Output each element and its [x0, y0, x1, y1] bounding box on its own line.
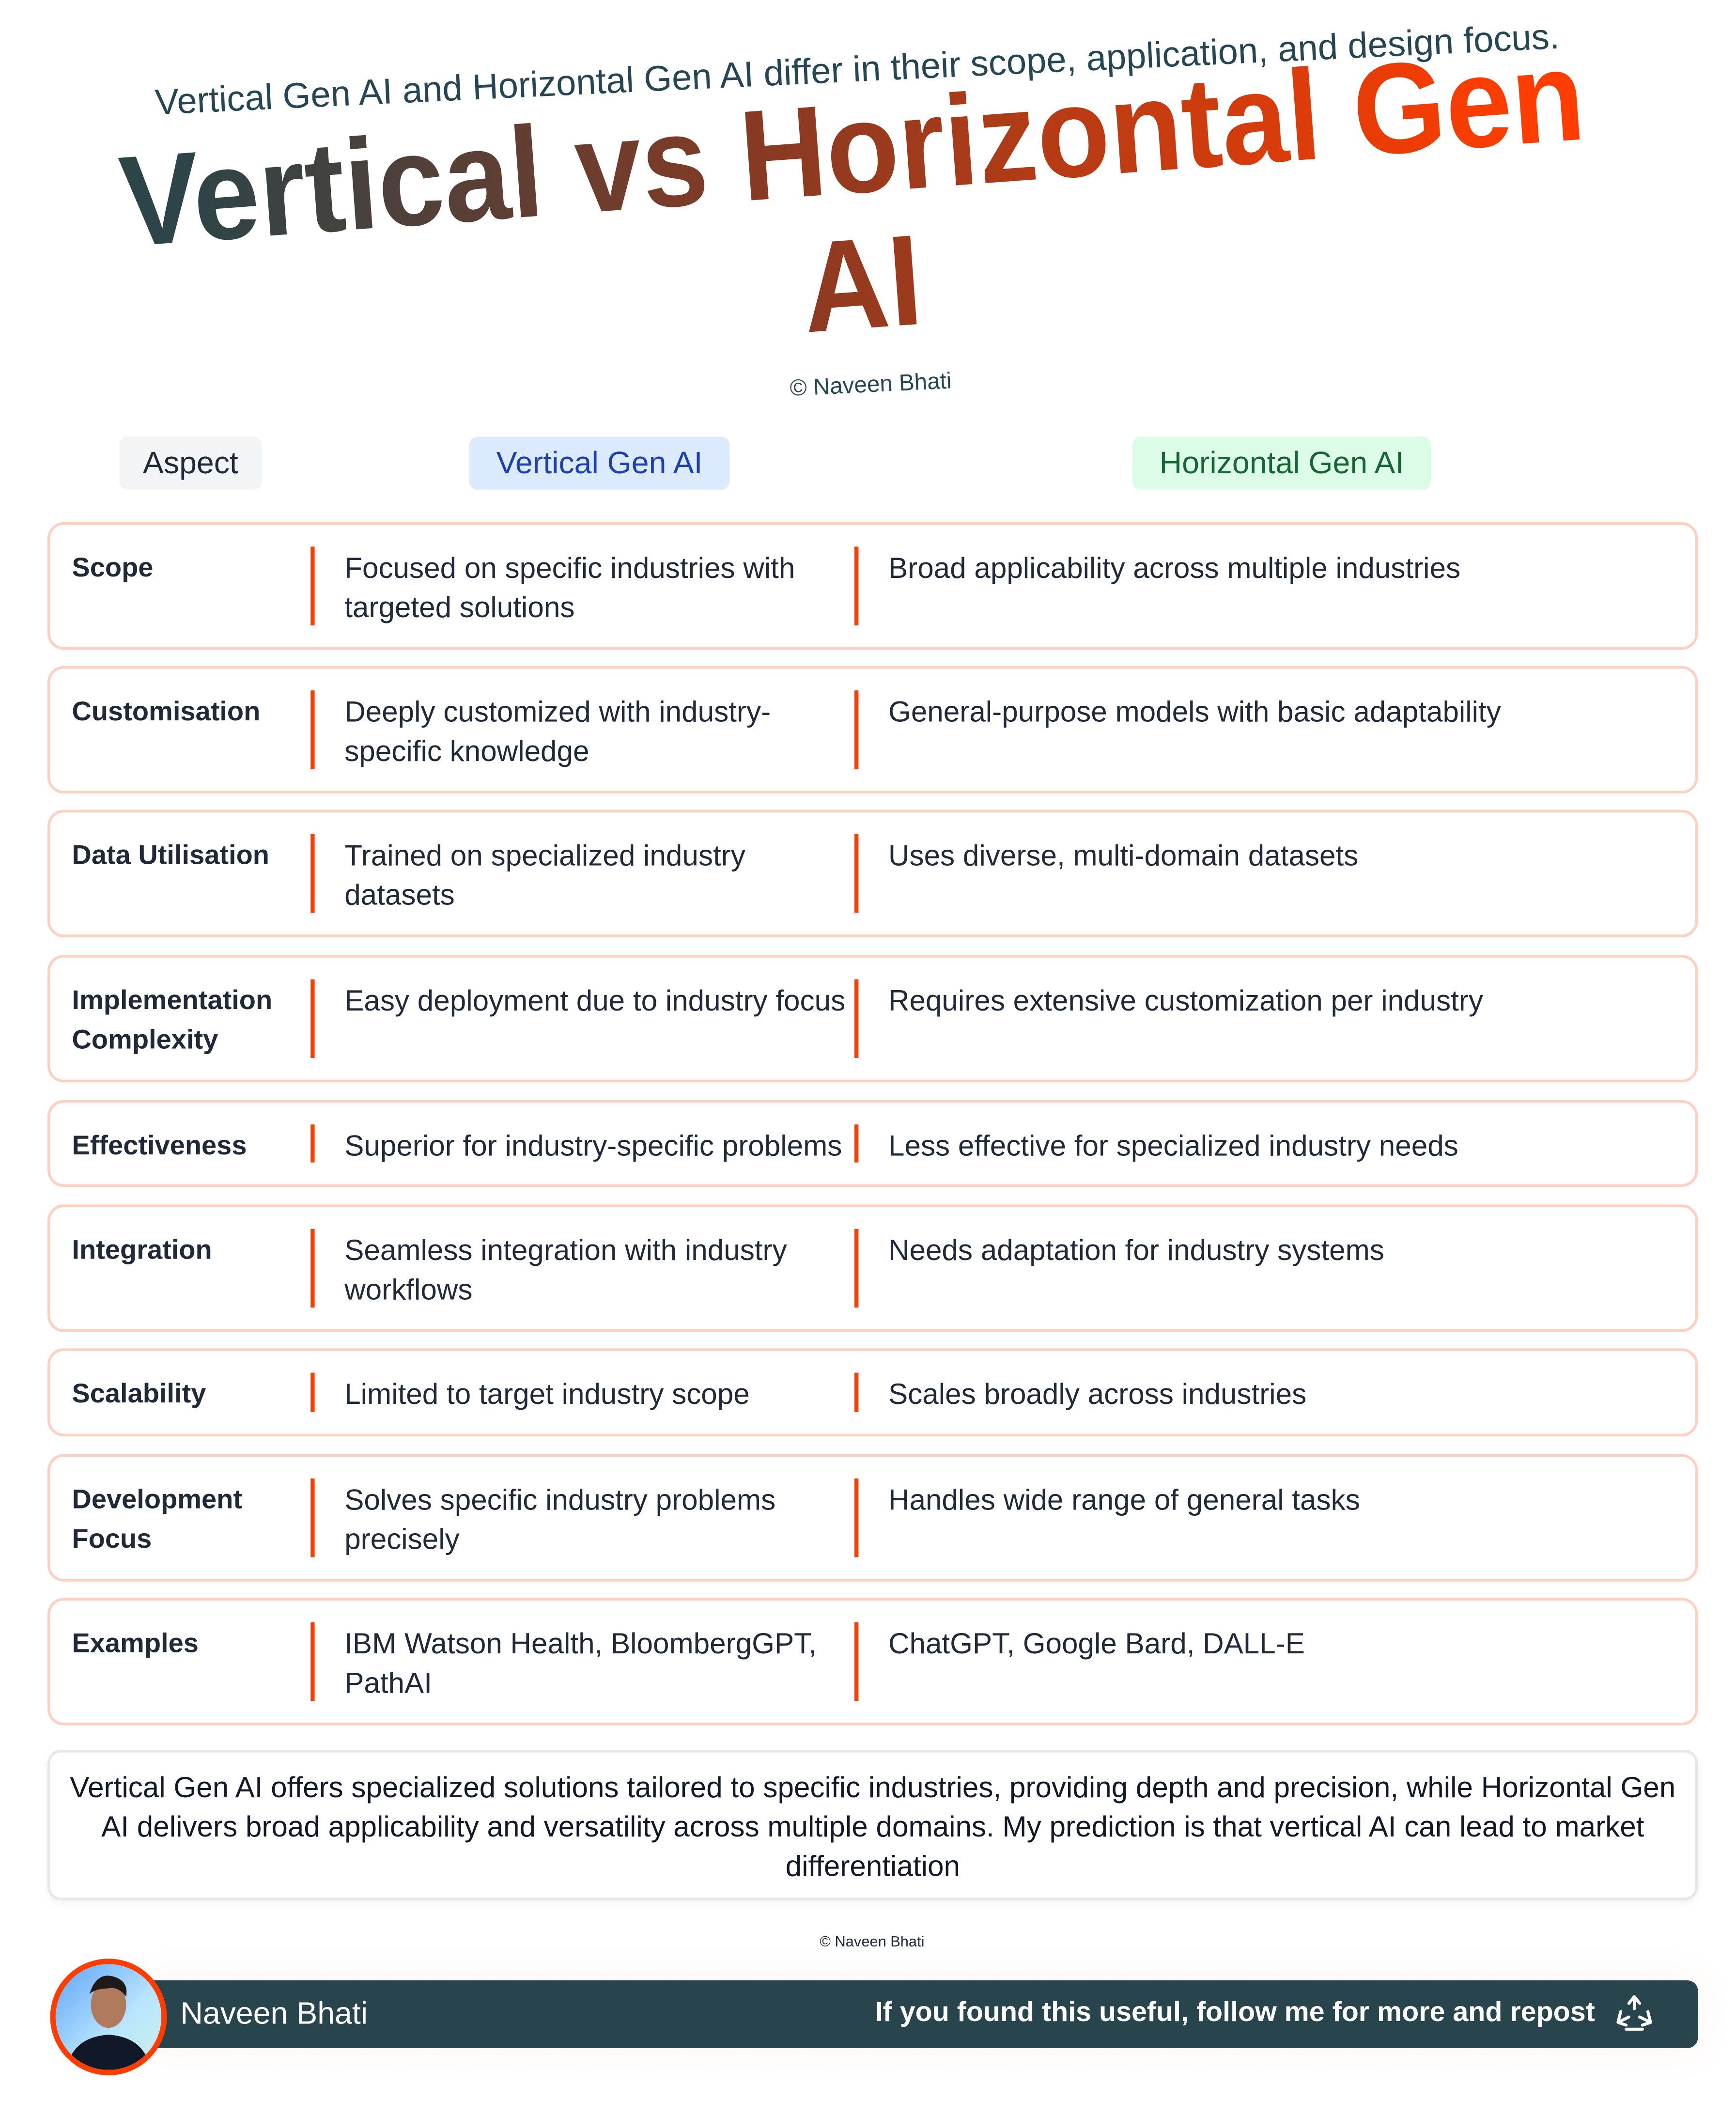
row: Integration: Integration: [72, 1236, 212, 1265]
row: Development Focus: [47, 1454, 1698, 1582]
row: Scalability: Limited to target industry scope: [344, 1378, 750, 1411]
row: Scope: Broad applicability across multiple industries: [888, 552, 1460, 585]
row: Development Focus: Development Focus: [72, 1485, 242, 1555]
row: Scalability: Scales broadly across industries: [888, 1378, 1306, 1411]
avatar: [50, 1959, 167, 2075]
row: Scalability: [47, 1348, 1698, 1436]
row: Integration: Needs adaptation for industry systems: [888, 1234, 1384, 1267]
row: Integration: [47, 1204, 1698, 1332]
header: Aspect: [119, 437, 262, 490]
title: [108, 28, 1606, 406]
row: Customisation: Deeply customized with industry-specific knowledge: [344, 696, 771, 768]
row: Data Utilisation: Data Utilisation: [72, 841, 269, 871]
row: Implementation Complexity: Requires extensive customization per industry: [888, 985, 1483, 1017]
row: Examples: IBM Watson Health, BloombergGPT, PathAI: [344, 1628, 817, 1699]
row: Effectiveness: [47, 1100, 1698, 1187]
subtitle: Vertical Gen AI and Horizontal Gen AI differ in their scope, application, and design focus.: [154, 16, 1560, 123]
row: Customisation: General-purpose models with basic adaptability: [888, 696, 1501, 729]
author credit: © Naveen Bhati: [789, 368, 952, 401]
summary box: Vertical Gen AI offers specialized solutions tailored to specific industries, providing depth and precision, while Horizontal Gen AI delivers broad applicability and versatility across multiple domains. My prediction is that vertical AI can lead to market differentiation: [70, 1772, 1675, 1883]
header: Horizontal Gen AI: [1132, 437, 1431, 490]
row: Data Utilisation: Uses diverse, multi-domain datasets: [888, 840, 1358, 872]
row: Data Utilisation: [47, 810, 1698, 937]
row: Scope: Focused on specific industries with targeted solutions: [344, 552, 795, 624]
row: Customisation: Customisation: [72, 697, 260, 727]
title: AI: [798, 209, 927, 361]
row: Implementation Complexity: [47, 955, 1698, 1082]
header: Aspect: Aspect: [143, 445, 238, 480]
row: Effectiveness: Superior for industry-specific problems: [344, 1130, 842, 1163]
row: Scalability: Scalability: [72, 1380, 206, 1409]
row: Implementation Complexity: Easy deployment due to industry focus: [344, 985, 845, 1017]
row: Implementation Complexity: Implementation Complexity: [72, 986, 272, 1055]
row: Scope: Scope: [72, 553, 153, 583]
row: Effectiveness: Effectiveness: [72, 1131, 247, 1161]
row: Examples: ChatGPT, Google Bard, DALL-E: [888, 1628, 1305, 1660]
row: Development Focus: Solves specific industry problems precisely: [344, 1484, 775, 1556]
header: Vertical Gen AI: [469, 437, 729, 490]
footer bar: [142, 1980, 1698, 2048]
row: Scope: [47, 522, 1698, 650]
icon: repost: [1616, 1995, 1652, 2031]
row: Customisation: [47, 666, 1698, 794]
row: Data Utilisation: Trained on specialized industry datasets: [344, 840, 745, 912]
footer call to action: If you found this useful, follow me for more and repost: [875, 1997, 1595, 2028]
row: Development Focus: Handles wide range of general tasks: [888, 1484, 1360, 1516]
row: Effectiveness: Less effective for specialized industry needs: [888, 1130, 1458, 1163]
header: Vertical Gen AI: Vertical Gen AI: [496, 445, 703, 480]
title: Vertical vs Horizontal Gen: [115, 24, 1589, 275]
row: Examples: [47, 1598, 1698, 1726]
row: Examples: Examples: [72, 1629, 199, 1659]
footer name: Naveen Bhati: [180, 1995, 368, 2031]
header: Horizontal Gen AI: Horizontal Gen AI: [1160, 445, 1404, 480]
row: Integration: Seamless integration with industry workflows: [344, 1234, 787, 1306]
small credit: © Naveen Bhati: [820, 1934, 925, 1950]
